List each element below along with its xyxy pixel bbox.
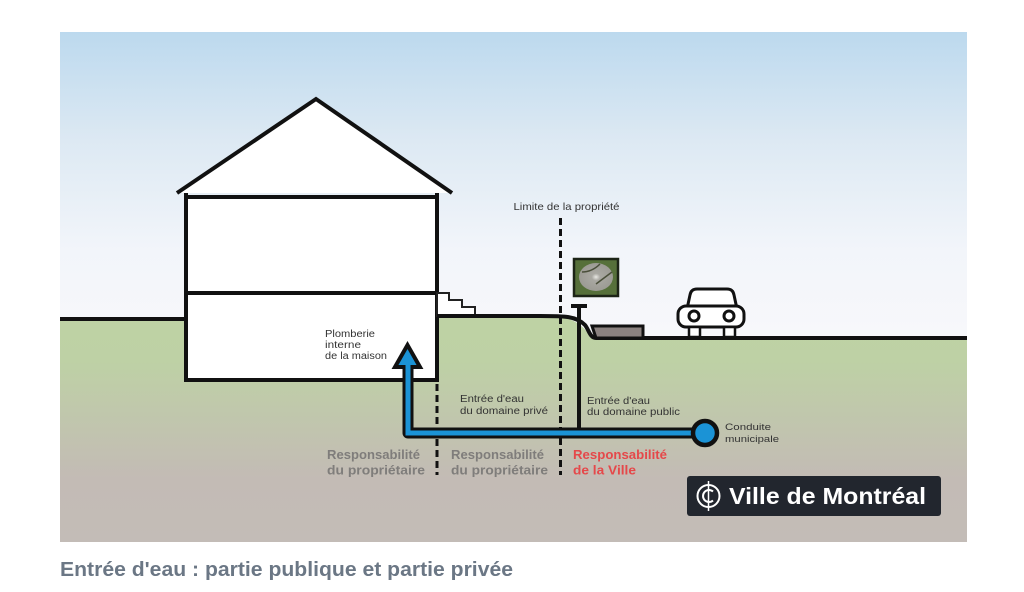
label: private water entrance: du domaine privé [460,406,548,417]
label: owner responsibility left: du propriétaire [327,462,425,478]
label: property limit: Limite de la propriété [514,201,620,213]
label: municipal main: Conduite [725,422,771,433]
badge: Ville de Montréal [687,476,941,516]
label: city responsibility: Responsabilité [573,447,667,462]
property limit dashed line [559,218,562,475]
label: internal plumbing: de la maison [325,351,387,362]
label: private water entrance: Entrée d'eau [460,394,524,405]
icon: city logo [698,481,720,511]
ground line [60,316,967,338]
house [177,99,452,380]
label: public water entrance: Entrée d'eau [587,396,650,407]
curb [592,326,643,338]
badge: Ville de Montréal: Ville de Montréal [729,483,926,509]
municipal main [693,421,717,445]
ground background [60,316,967,542]
label: owner responsibility right: Responsabilité [451,447,544,462]
service valve and vertical pipe [571,306,587,430]
caption: Entrée d'eau : partie publique et partie privée [60,559,513,581]
blue water pipe with arrow [395,345,705,433]
label: internal plumbing: interne [325,340,362,351]
label: owner responsibility left: Responsabilité [327,447,420,462]
entrance steps [437,293,475,316]
sky background [60,32,967,344]
car [678,289,744,337]
label: internal plumbing: Plomberie [325,329,375,340]
label: owner responsibility right: du propriétaire [451,462,548,478]
label: city responsibility: de la Ville [573,462,636,478]
icon: manhole photo [574,259,618,296]
label: municipal main: municipale [725,434,779,445]
house limit dashed line [436,384,438,475]
label: public water entrance: du domaine public [587,407,680,418]
